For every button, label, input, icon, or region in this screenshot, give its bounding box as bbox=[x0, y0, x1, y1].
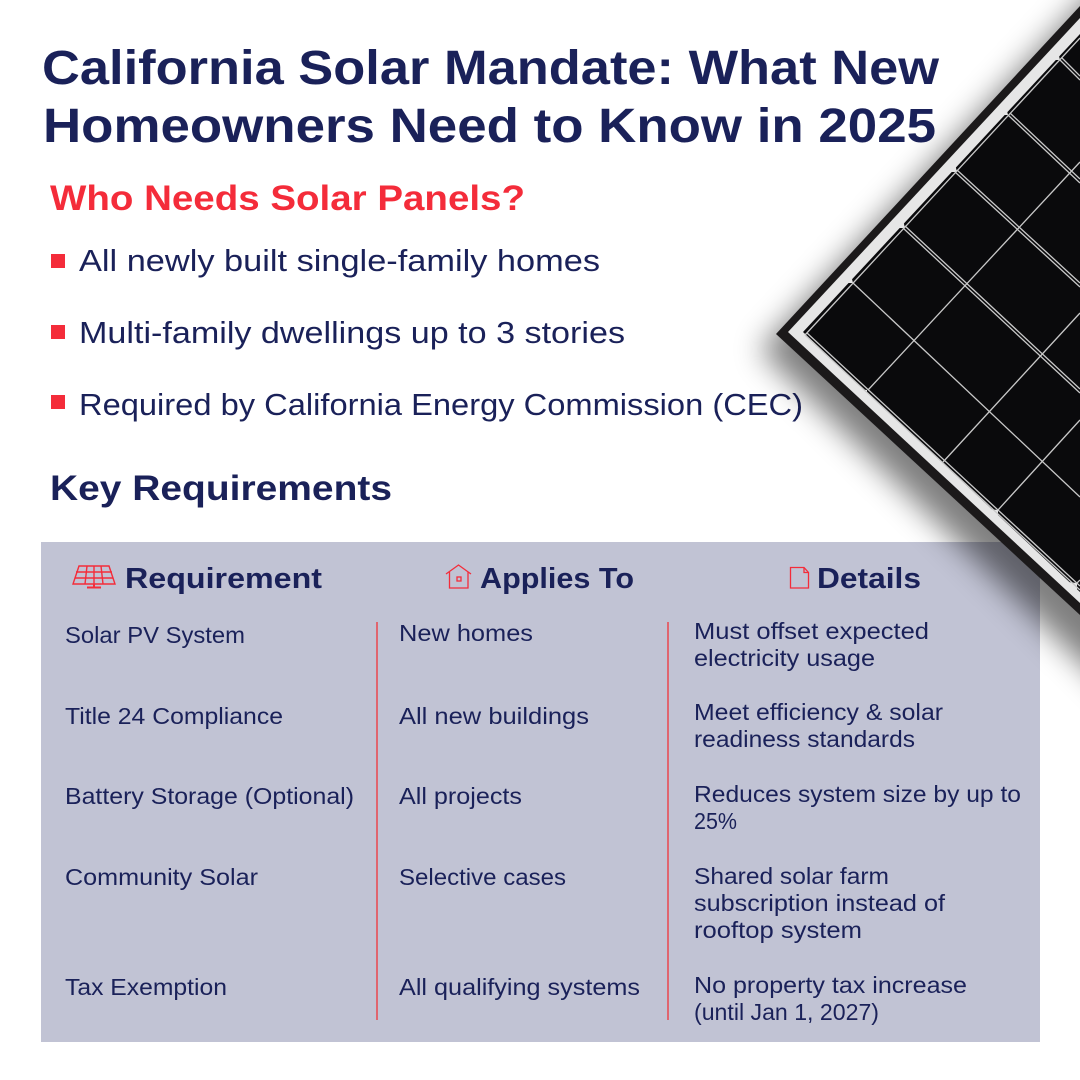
row: solar pv system: New homes bbox=[399, 620, 533, 646]
row: title 24 compliance: Title 24 Compliance bbox=[65, 703, 283, 729]
row: title 24 compliance: readiness standards bbox=[694, 726, 915, 752]
row: solar pv system: Must offset expected bbox=[694, 618, 929, 644]
column divider bbox=[376, 622, 378, 1020]
heading: key requirements: Key Requirements bbox=[50, 469, 392, 508]
bullet list bbox=[51, 243, 803, 422]
row: battery storage: Reduces system size by up to bbox=[694, 781, 1021, 807]
row: community solar: rooftop system bbox=[694, 917, 862, 943]
row: battery storage bbox=[65, 781, 1021, 834]
row: community solar: subscription instead of bbox=[694, 890, 945, 916]
bullet: multi-family dwellings: Multi-family dwellings up to 3 stories bbox=[79, 315, 625, 350]
row: community solar: Selective cases bbox=[399, 864, 566, 890]
title: California Solar Mandate: What New bbox=[42, 42, 940, 95]
row: tax exemption: All qualifying systems bbox=[399, 974, 640, 1000]
row: tax exemption: No property tax increase bbox=[694, 972, 967, 998]
row: community solar: Shared solar farm bbox=[694, 863, 889, 889]
bullet: single-family homes: All newly built single-family homes bbox=[79, 243, 600, 278]
row: tax exemption bbox=[65, 972, 967, 1025]
row: community solar: Community Solar bbox=[65, 864, 258, 890]
row: battery storage: All projects bbox=[399, 783, 522, 809]
row: tax exemption: Tax Exemption bbox=[65, 974, 227, 1000]
row: title 24 compliance bbox=[65, 699, 943, 752]
row: solar pv system: electricity usage bbox=[694, 645, 875, 671]
icon: house bbox=[446, 565, 471, 588]
column divider bbox=[667, 622, 669, 1020]
bullet: CEC: Required by California Energy Commission (CEC) bbox=[79, 387, 803, 422]
row: battery storage: Battery Storage (Optional) bbox=[65, 783, 354, 809]
row: community solar bbox=[65, 863, 945, 943]
title: Homeowners Need to Know in 2025 bbox=[43, 100, 936, 153]
row: tax exemption: (until Jan 1, 2027) bbox=[694, 999, 879, 1025]
icon: document bbox=[790, 568, 808, 588]
row: title 24 compliance: Meet efficiency & solar bbox=[694, 699, 943, 725]
row: solar pv system: Solar PV System bbox=[65, 622, 245, 648]
panel: requirements table bbox=[41, 542, 1040, 1042]
row: battery storage: 25% bbox=[694, 808, 737, 834]
row: solar pv system bbox=[65, 618, 929, 671]
column header: requirement: Requirement bbox=[125, 563, 322, 595]
icon: solar panel bbox=[73, 566, 115, 588]
column header: applies to: Applies To bbox=[480, 563, 634, 595]
heading: who needs solar panels: Who Needs Solar Panels? bbox=[50, 179, 525, 218]
row: title 24 compliance: All new buildings bbox=[399, 703, 589, 729]
title bbox=[42, 42, 940, 153]
column header: details: Details bbox=[817, 563, 921, 595]
solar panel photo bbox=[760, 0, 1080, 700]
